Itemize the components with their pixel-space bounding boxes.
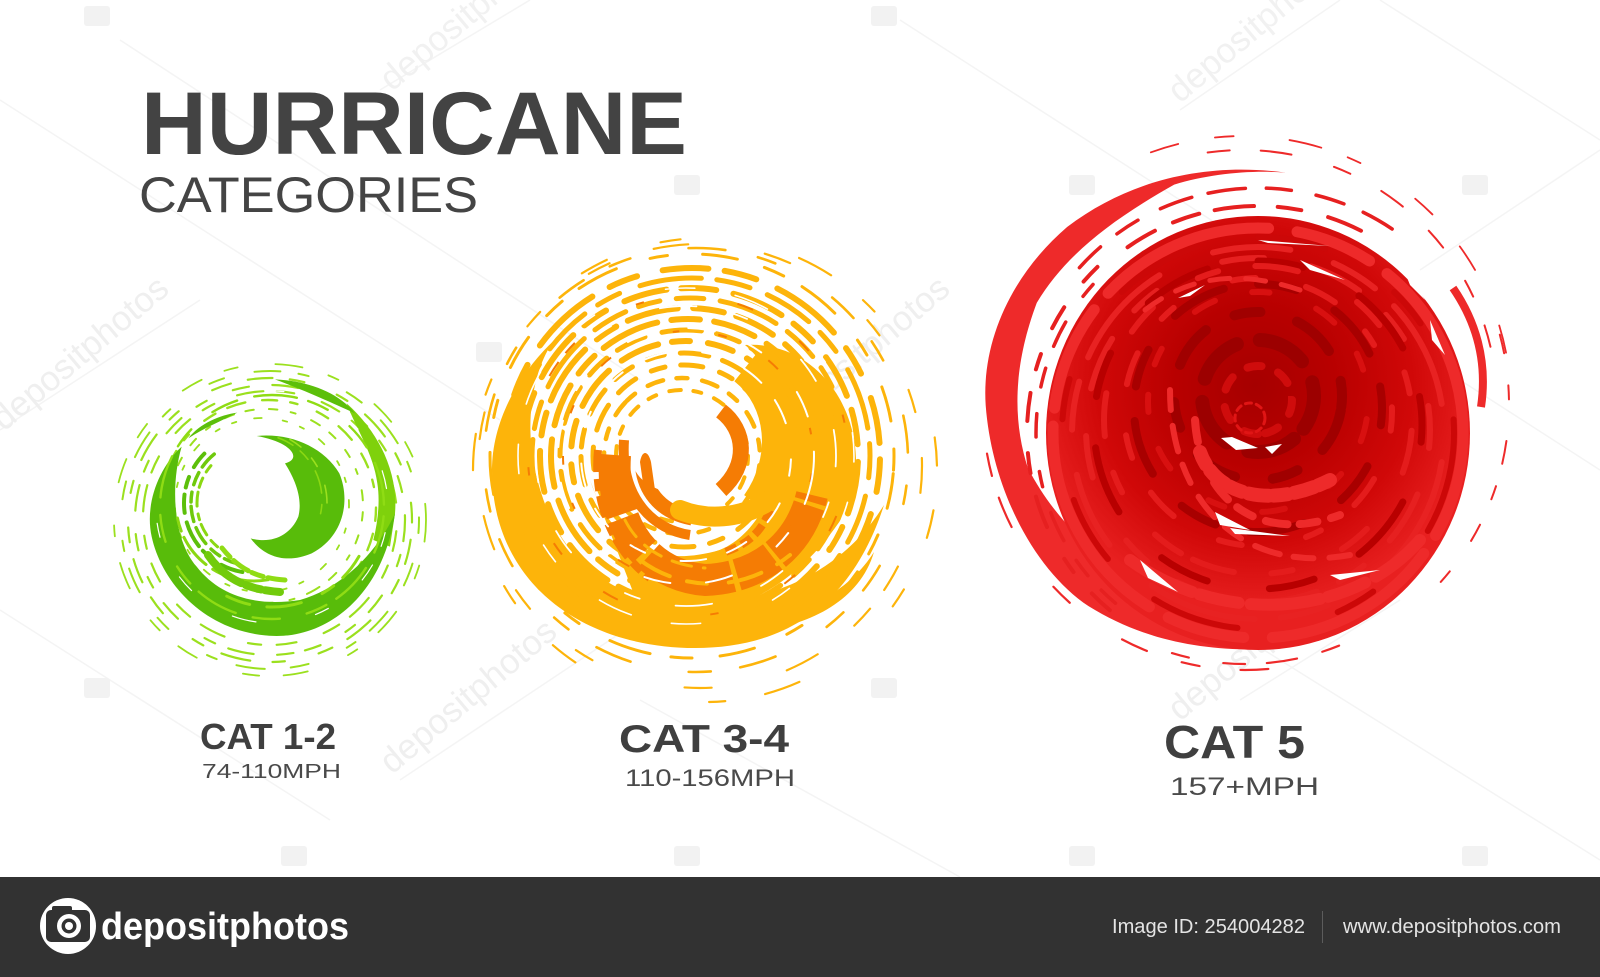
red spiral: core disk — [1046, 216, 1470, 650]
orange spiral: outer dashes — [387, 153, 1013, 779]
label: CAT 5 — [1164, 716, 1319, 801]
image id: Image ID: 254004282 — [1112, 916, 1305, 938]
website: www.depositphotos.com — [1342, 916, 1561, 938]
label: CAT 3-4 — [619, 718, 795, 792]
logo wordmark: depositphotos — [101, 906, 349, 948]
speed: 110-156 mph: 110-156MPH — [625, 765, 795, 792]
footer bar — [0, 877, 1600, 977]
label: CAT 1-2 — [200, 716, 341, 783]
green spiral: outer dashes — [69, 319, 471, 721]
speed: 74-110 mph: 74-110MPH — [202, 761, 341, 783]
red spiral: outer dashes — [900, 61, 1586, 747]
orange spiral: white streaks — [471, 241, 901, 671]
watermark pattern: depositphotos — [1160, 558, 1352, 728]
orange spiral: eye — [632, 423, 728, 493]
orange spiral: solid crescent — [492, 335, 884, 648]
label: CAT 5: CAT 5 — [1164, 716, 1305, 768]
green spiral: band texture — [114, 349, 430, 665]
orange spiral: yellow patches — [625, 500, 790, 584]
green spiral: main band — [150, 379, 395, 636]
red spiral: dark and light dabs — [1004, 179, 1512, 687]
panel: category 5 hurricane — [900, 61, 1597, 767]
icon: camera logo — [40, 898, 96, 954]
label: CAT 1-2: CAT 1-2 — [200, 716, 336, 757]
red spiral: gap fragments — [919, 89, 1597, 767]
panel: category 3-4 hurricane — [387, 153, 1013, 779]
red spiral: white slivers — [1140, 240, 1445, 592]
title: HURRICANE: HURRICANE — [141, 73, 687, 173]
orange spiral: upper dashes — [464, 228, 920, 684]
watermark pattern: depositphotos — [765, 268, 957, 438]
subtitle: CATEGORIES: CATEGORIES — [139, 167, 478, 223]
red spiral: light lower sweep — [1130, 278, 1420, 605]
red spiral: outer sweeping band — [985, 170, 1286, 649]
watermark pattern: depositphotos — [372, 611, 564, 781]
label: CAT 3-4: CAT 3-4 — [619, 718, 789, 761]
orange spiral: inner orange bands — [463, 231, 913, 681]
panel: category 1-2 hurricane — [69, 319, 471, 721]
speed: 157+ mph: 157+MPH — [1170, 773, 1319, 801]
